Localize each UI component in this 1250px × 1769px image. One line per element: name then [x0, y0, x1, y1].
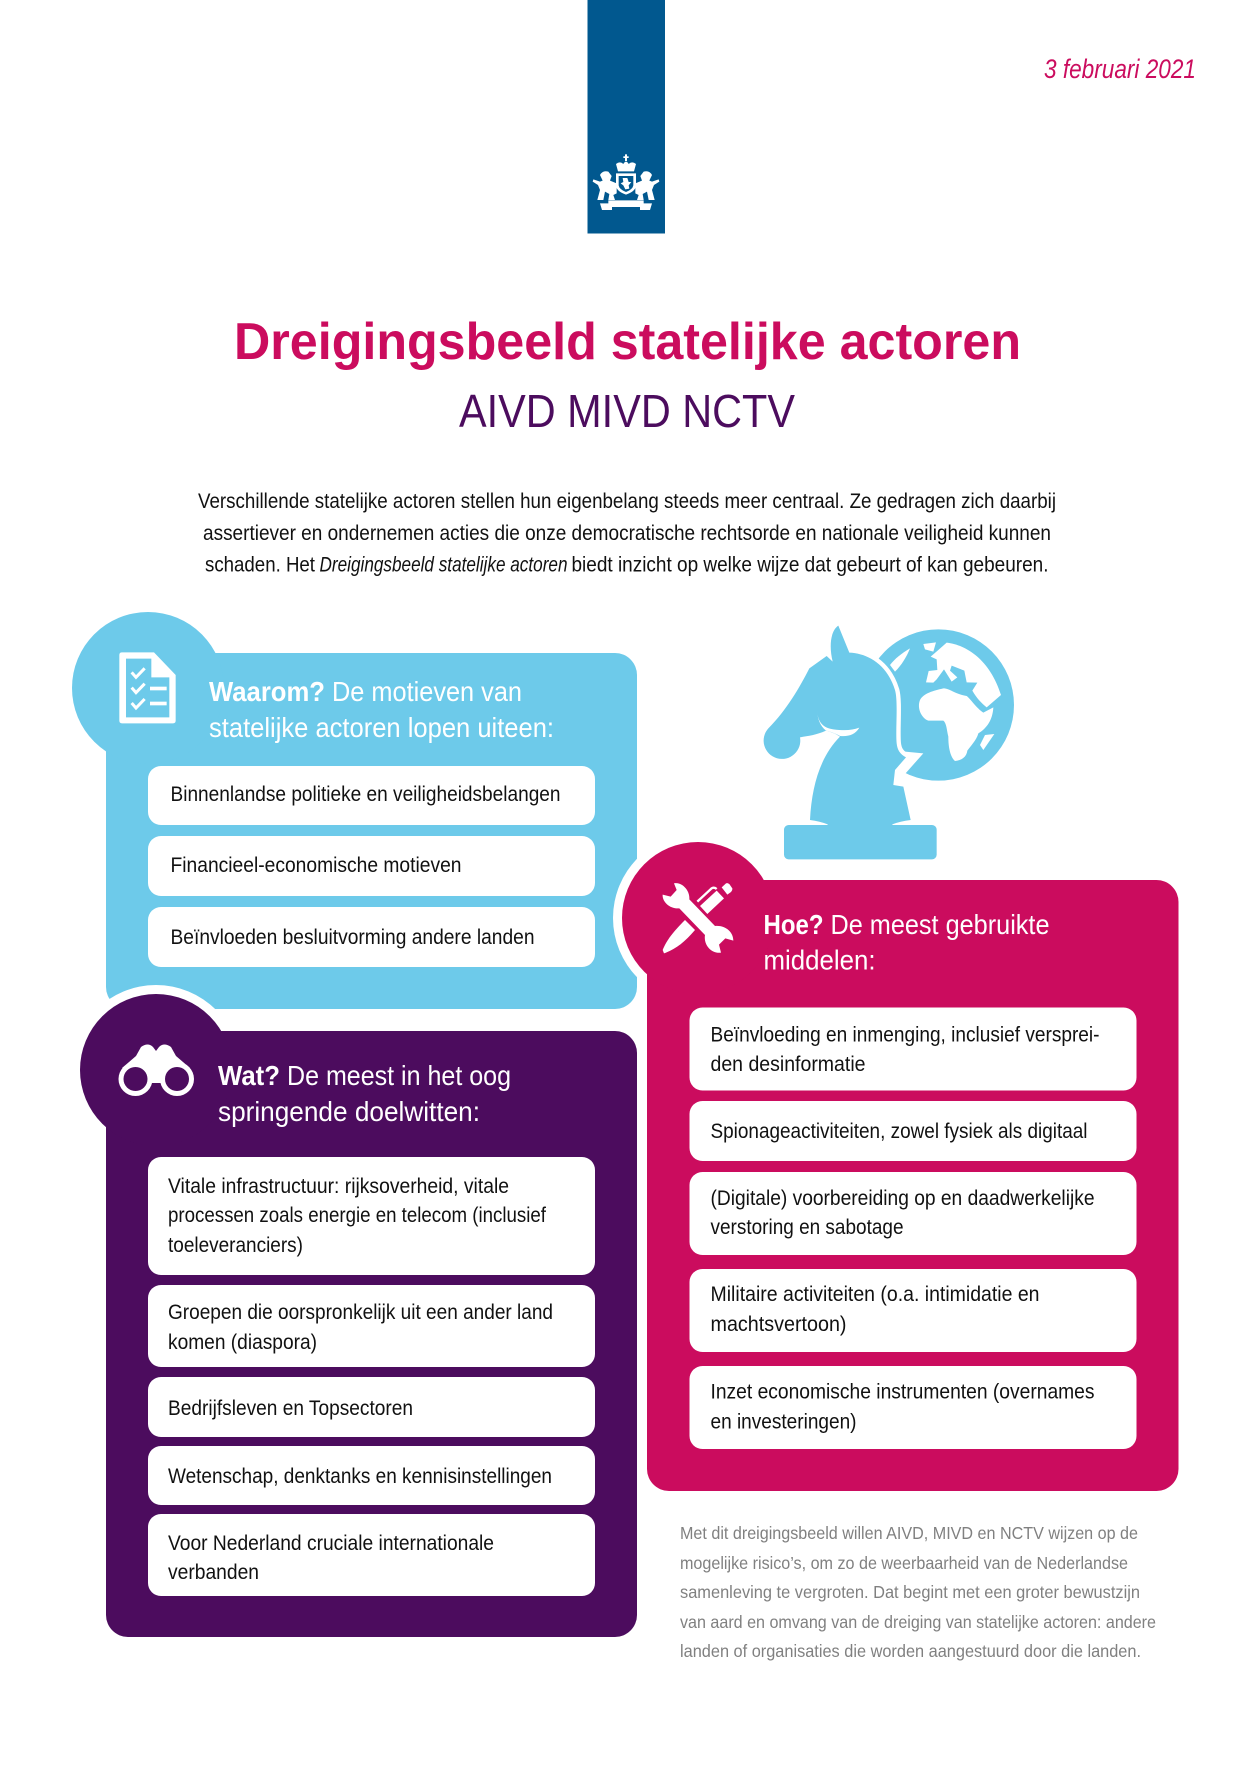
heading: Wat [218, 1060, 511, 1127]
item: beinvloeding [690, 1008, 1136, 1090]
item: vitale infrastructuur: Vitale infrastructuur: rijksoverheid, vitale [168, 1174, 509, 1198]
item: diaspora: komen (diaspora) [168, 1330, 317, 1354]
item: bedrijfsleven: Bedrijfsleven en Topsectoren [168, 1396, 413, 1420]
intro text block: schaden. Het [205, 554, 315, 576]
item: militaire activiteiten: Militaire activiteiten (o.a. intimidatie en [710, 1282, 1040, 1306]
item: besluitvorming [148, 907, 595, 967]
panel: Wat [71, 985, 637, 1637]
item: economische instrumenten: Inzet economische instrumenten (overnames [710, 1380, 1094, 1404]
item: internationale verbanden: verbanden [168, 1560, 259, 1584]
item: besluitvorming: Beïnvloeden besluitvorming andere landen [170, 925, 534, 949]
item: economische instrumenten [690, 1366, 1136, 1449]
intro text block: Dreigingsbeeld statelijke actoren [320, 554, 568, 576]
heading: Waarom: De motieven van [332, 676, 522, 707]
item: financieel-economisch: Financieel-economische motieven [170, 853, 462, 877]
item: sabotage: (Digitale) voorbereiding op en daadwerkelijke [710, 1186, 1094, 1210]
icon: binoculars [118, 1044, 194, 1096]
closing text block: Met dit dreigingsbeeld willen AIVD, MIVD en NCTV wijzen op de [680, 1523, 1138, 1543]
item: binnenlandse belangen [148, 766, 595, 825]
intro text block: assertiever en ondernemen acties die onze democratische rechtsorde en nationale veiligheid kunnen [203, 522, 1051, 545]
item: internationale verbanden: Voor Nederland cruciale internationale [168, 1531, 494, 1555]
closing text block: van aard en omvang van de dreiging van statelijke actoren: andere [680, 1612, 1156, 1632]
heading: Hoe [764, 909, 1050, 976]
item: beinvloeding: Beïnvloeding en inmenging, inclusief versprei- [710, 1022, 1100, 1046]
panel: Waarom [72, 612, 637, 1009]
heading: Waarom: statelijke actoren lopen uiteen: [209, 712, 554, 743]
item: diaspora: Groepen die oorspronkelijk uit een ander land [168, 1300, 553, 1324]
date: 3 februari 2021 [1044, 54, 1196, 84]
intro text block: Verschillende statelijke actoren stellen hun eigenbelang steeds meer centraal. Ze gedragen zich daarbij [198, 490, 1056, 513]
heading: Hoe: Hoe? [764, 909, 824, 940]
closing text block: samenleving te vergroten. Dat begint met een groter bewustzijn [680, 1582, 1140, 1602]
item: militaire activiteiten: machtsvertoon) [710, 1312, 846, 1336]
heading: Wat: springende doelwitten: [218, 1096, 480, 1127]
item: wetenschap: Wetenschap, denktanks en kennisinstellingen [168, 1464, 552, 1488]
item: bedrijfsleven [148, 1377, 595, 1437]
heading: Wat: De meest in het oog [287, 1060, 511, 1091]
item: diaspora [148, 1285, 595, 1367]
item: sabotage: verstoring en sabotage [710, 1215, 904, 1239]
logo: Rijksoverheid blue bar with coat of arms [588, 0, 665, 234]
item: wetenschap [148, 1446, 595, 1505]
heading: Hoe: De meest gebruikte [830, 909, 1050, 940]
intro text block: biedt inzicht op welke wijze dat gebeurt of kan gebeuren. [572, 554, 1048, 576]
heading: Waarom: Waarom? [209, 676, 325, 707]
heading: Waarom [209, 676, 554, 743]
closing text block [680, 1523, 1156, 1661]
closing text block: landen of organisaties die worden aangestuurd door die landen. [680, 1641, 1141, 1661]
closing text block: mogelijke risico’s, om zo de weerbaarheid van de Nederlandse [680, 1553, 1128, 1573]
item: beinvloeding: den desinformatie [710, 1052, 866, 1076]
item: vitale infrastructuur: processen zoals energie en telecom (inclusief [168, 1203, 546, 1227]
item: spionage [690, 1101, 1136, 1161]
title: Dreigingsbeeld statelijke actoren [234, 313, 1021, 371]
intro text block [198, 490, 1056, 576]
icon: coat of arms [593, 154, 659, 210]
item: financieel-economisch [148, 836, 595, 896]
subtitle: AIVD MIVD NCTV [459, 385, 795, 437]
icon: checklist document [119, 652, 176, 723]
item: vitale infrastructuur: toeleveranciers) [168, 1233, 303, 1257]
heading: Hoe: middelen: [764, 944, 876, 976]
item: internationale verbanden [148, 1514, 595, 1596]
item: economische instrumenten: en investeringen) [710, 1410, 856, 1434]
icon: wrench and pen [663, 883, 733, 953]
item: binnenlandse belangen: Binnenlandse politieke en veiligheidsbelangen [170, 782, 560, 806]
heading: Wat: Wat? [218, 1060, 280, 1091]
item: vitale infrastructuur [148, 1157, 595, 1275]
item: militaire activiteiten [690, 1269, 1136, 1352]
item: spionage: Spionageactiviteiten, zowel fysiek als digitaal [710, 1119, 1088, 1143]
panel: Hoe [613, 833, 1178, 1491]
item: sabotage [690, 1172, 1136, 1255]
icon: chess knight with globe [764, 626, 1014, 859]
